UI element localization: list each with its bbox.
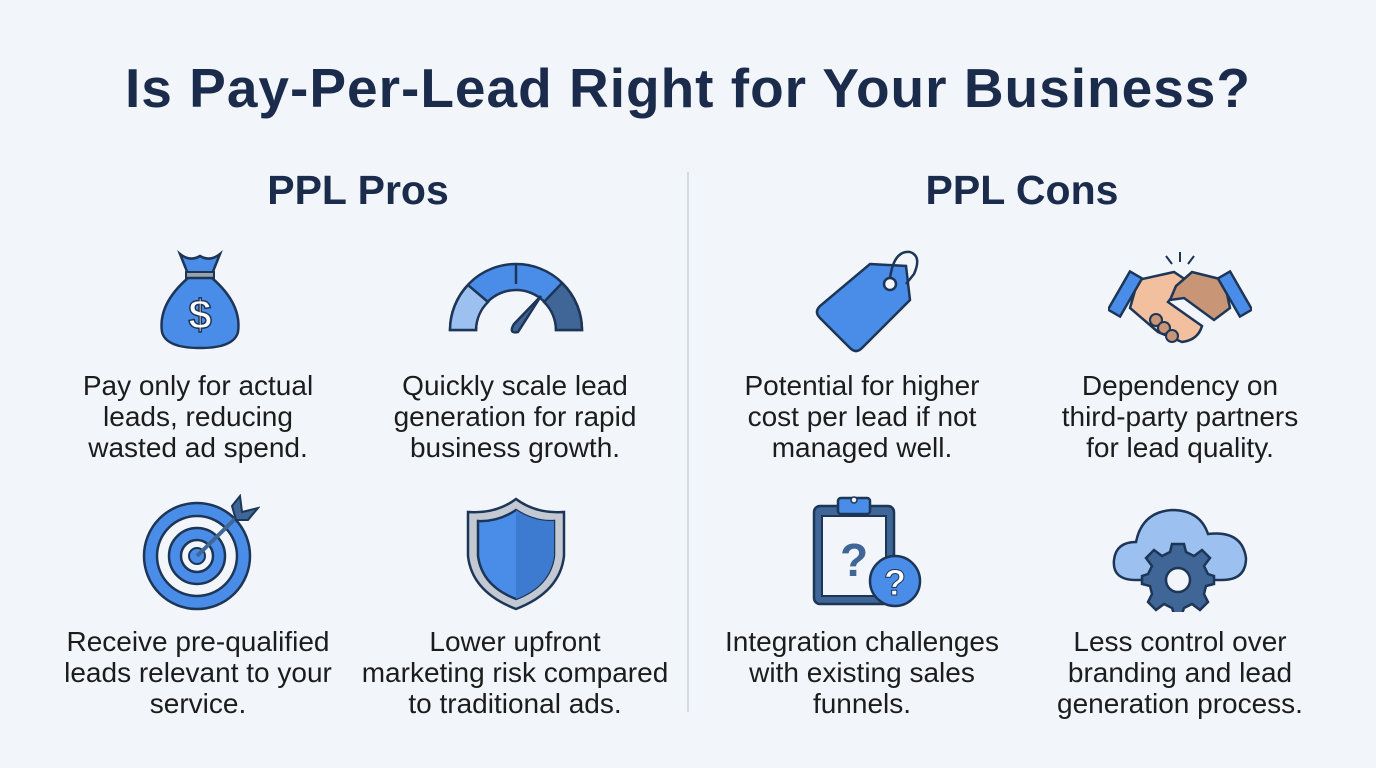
text: con 3 <box>725 626 999 719</box>
text: con 1: managed well. <box>772 432 952 463</box>
icon: clipboard with question: ? <box>840 534 868 586</box>
text: pro 2: business growth. <box>410 432 620 463</box>
text: pro 3: service. <box>150 688 246 719</box>
icon: money bag: $ <box>188 291 212 338</box>
text: con 4 <box>1057 626 1303 719</box>
text: con 3: funnels. <box>813 688 911 719</box>
title: Is Pay-Per-Lead Right for Your Business? <box>125 57 1251 119</box>
text: con 4: Less control over <box>1073 626 1287 657</box>
text: con 2: for lead quality. <box>1086 432 1274 463</box>
text: pro 4: marketing risk compared <box>362 657 668 688</box>
text: con 4: branding and lead <box>1068 657 1292 688</box>
text: pro 3 <box>64 626 332 719</box>
text: con 2: third-party partners <box>1062 401 1298 432</box>
text: pro 1: Pay only for actual <box>83 370 313 401</box>
text: pro 2 <box>394 370 636 463</box>
icon: shield <box>466 498 566 610</box>
text: con 3: Integration challenges <box>725 626 999 657</box>
heading: PPL Cons: PPL Cons <box>926 167 1118 213</box>
text: pro 4: to traditional ads. <box>408 688 622 719</box>
text: con 3: with existing sales <box>749 657 975 688</box>
icon: cloud with gear <box>1112 508 1248 612</box>
icon: clipboard with question <box>812 496 922 608</box>
text: con 2: Dependency on <box>1082 370 1278 401</box>
text: pro 2: Quickly scale lead <box>402 370 628 401</box>
text: con 1 <box>744 370 980 463</box>
text: pro 1: leads, reducing <box>103 401 293 432</box>
icon: clipboard with question: ? <box>884 562 906 603</box>
text: pro 3: Receive pre-qualified <box>66 626 330 657</box>
text: pro 1: wasted ad spend. <box>88 432 308 463</box>
text: con 2 <box>1062 370 1298 463</box>
text: pro 2: generation for rapid <box>394 401 636 432</box>
icon: money bag <box>160 250 240 350</box>
text: pro 4 <box>362 626 668 719</box>
text: con 1: cost per lead if not <box>748 401 976 432</box>
divider <box>687 172 689 712</box>
text: pro 1 <box>83 370 313 463</box>
text: pro 3: leads relevant to your <box>64 657 332 688</box>
icon: gauge <box>448 262 584 334</box>
icon: handshake <box>1108 252 1252 344</box>
text: con 4: generation process. <box>1057 688 1303 719</box>
icon: price tag <box>816 250 918 352</box>
text: pro 4: Lower upfront <box>429 626 601 657</box>
text: con 1: Potential for higher <box>744 370 980 401</box>
icon: target <box>142 494 260 610</box>
heading: PPL Pros: PPL Pros <box>267 167 449 213</box>
